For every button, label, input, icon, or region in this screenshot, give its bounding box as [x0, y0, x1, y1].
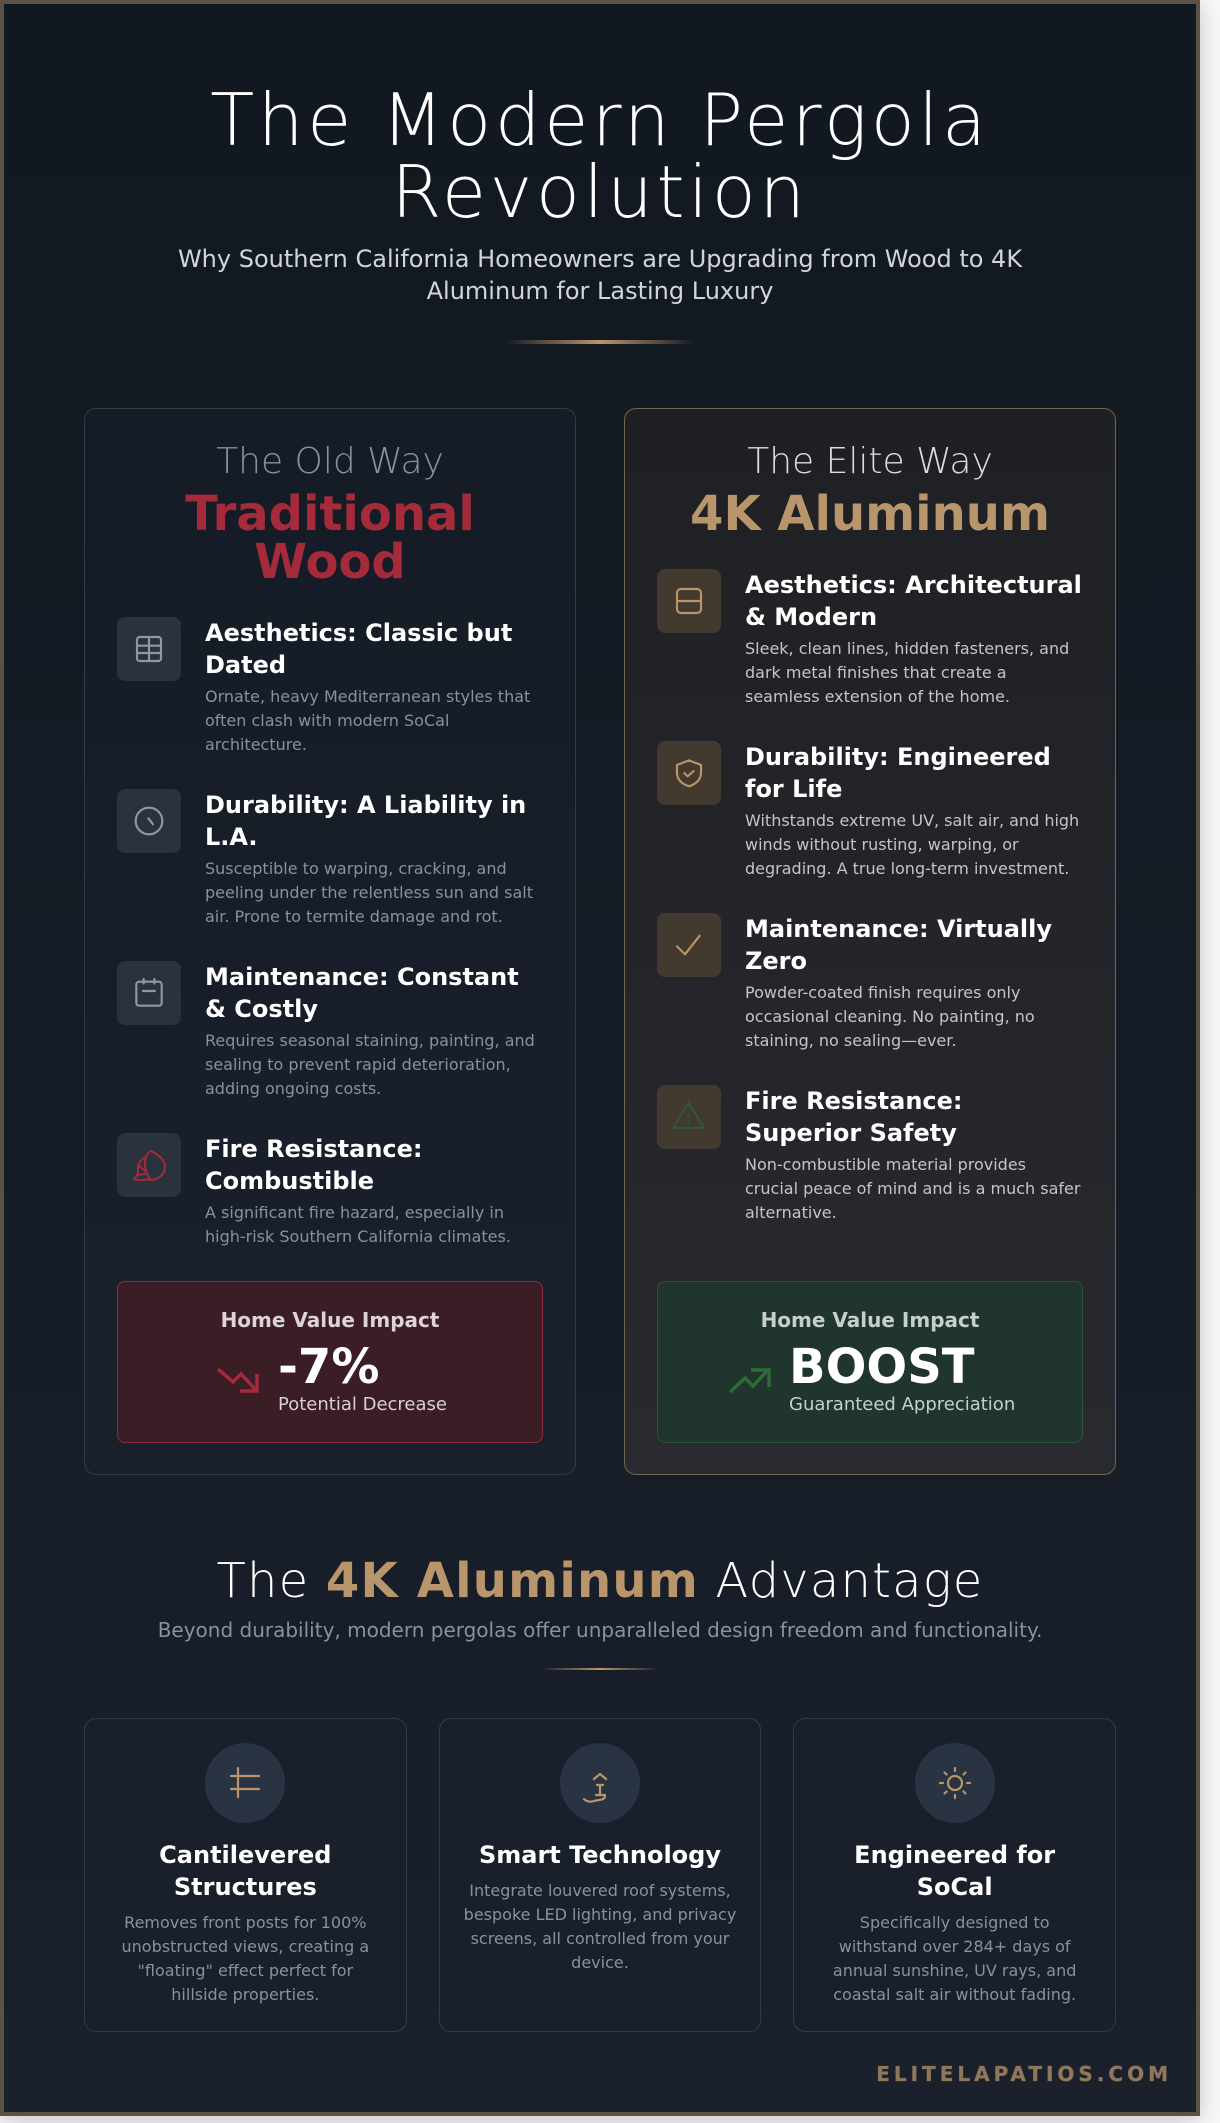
item title: Aesthetics: Architectural [745, 571, 1082, 599]
icon: trending down arrow [216, 1368, 259, 1393]
card: smart technology [439, 1718, 761, 2032]
item description: Requires seasonal staining, painting, and [205, 1031, 535, 1050]
item description [745, 983, 1035, 1050]
item title: Durability: Engineered [745, 743, 1051, 771]
item description: adding ongoing costs. [205, 1079, 381, 1098]
item description: architecture. [205, 735, 307, 754]
impact value: -7% [278, 1339, 379, 1395]
item title: Dated [205, 651, 286, 679]
card description: unobstructed views, creating a [122, 1937, 369, 1956]
item description [205, 1203, 511, 1246]
item description: Ornate, heavy Mediterranean styles that [205, 687, 530, 706]
panel: the old way [84, 408, 576, 1475]
card description [122, 1913, 369, 2004]
card title: Cantilevered [159, 1841, 331, 1869]
item description: Sleek, clean lines, hidden fasteners, and [745, 639, 1069, 658]
item: aesthetics [117, 617, 530, 754]
item title: Aesthetics: Classic but [205, 619, 512, 647]
item description [205, 859, 533, 926]
item title: & Costly [205, 995, 318, 1023]
card: cantilevered structures [84, 1718, 407, 2032]
item description: seamless extension of the home. [745, 687, 1010, 706]
item description: occasional cleaning. No painting, no [745, 1007, 1035, 1026]
icon: trending up arrow [729, 1368, 771, 1394]
callout: home value impact boost [657, 1281, 1083, 1443]
impact caption: Potential Decrease [278, 1394, 447, 1415]
section divider [540, 1668, 660, 1670]
card description: "floating" effect perfect for [138, 1961, 353, 1980]
item description: Susceptible to warping, cracking, and [205, 859, 507, 878]
card description: Specifically designed to [860, 1913, 1050, 1932]
item title: & Modern [745, 603, 877, 631]
item description: dark metal finishes that create a [745, 663, 1007, 682]
item description [205, 687, 530, 754]
icon: check mark [657, 913, 721, 977]
impact label: Home Value Impact [761, 1308, 979, 1332]
item description: peeling under the relentless sun and salt [205, 883, 533, 902]
card description: Integrate louvered roof systems, [469, 1881, 731, 1900]
item title [205, 1135, 422, 1195]
item title: Maintenance: Constant [205, 963, 519, 991]
panel heading: the old way: The Old Way [216, 441, 444, 482]
panel name: traditional wood: Traditional [185, 486, 475, 542]
item description: often clash with modern SoCal [205, 711, 449, 730]
icon: panel [657, 569, 721, 633]
card title: Engineered for [854, 1841, 1055, 1869]
card description: coastal salt air without fading. [833, 1985, 1076, 2004]
item title: Fire Resistance: [205, 1135, 422, 1163]
item description [745, 639, 1069, 706]
icon: cantilever [205, 1743, 285, 1823]
item description: degrading. A true long-term investment. [745, 859, 1069, 878]
header divider [504, 340, 696, 344]
card description: hillside properties. [171, 1985, 319, 2004]
card title [159, 1841, 331, 1901]
item title [205, 791, 526, 851]
item title: Maintenance: Virtually [745, 915, 1052, 943]
item title [745, 1087, 962, 1147]
icon: calendar [117, 961, 181, 1025]
item title: Fire Resistance: [745, 1087, 962, 1115]
card title: Structures [174, 1873, 317, 1901]
item title [745, 915, 1052, 975]
panel name: traditional wood [185, 486, 475, 590]
icon: smart control [560, 1743, 640, 1823]
item description: Withstands extreme UV, salt air, and high [745, 811, 1079, 830]
item title: Combustible [205, 1167, 374, 1195]
impact label: Home Value Impact [221, 1308, 439, 1332]
title: Revolution [391, 150, 809, 234]
item title [745, 571, 1082, 631]
item: durability [117, 789, 533, 926]
panel: the elite way [624, 408, 1116, 1475]
item title [205, 963, 519, 1023]
card: engineered for socal [793, 1718, 1116, 2032]
panel heading: the elite way: The Elite Way [747, 441, 993, 482]
item description: staining, no sealing—ever. [745, 1031, 956, 1050]
card title: Smart Technology [479, 1841, 721, 1869]
item description: crucial peace of mind and is a much safer [745, 1179, 1080, 1198]
card description [464, 1881, 736, 1972]
card description: bespoke LED lighting, and privacy [464, 1905, 736, 1924]
item title: L.A. [205, 823, 258, 851]
item: fire resistance [657, 1085, 1080, 1222]
panel name: traditional wood: Wood [254, 534, 406, 590]
panel name: 4k aluminum: 4K Aluminum [690, 486, 1050, 542]
card title: SoCal [917, 1873, 993, 1901]
card description: withstand over 284+ days of [839, 1937, 1071, 1956]
item description: A significant fire hazard, especially in [205, 1203, 504, 1222]
card description [833, 1913, 1076, 2004]
card description: annual sunshine, UV rays, and [833, 1961, 1076, 1980]
card title [854, 1841, 1056, 1901]
item: fire resistance [117, 1133, 511, 1246]
title: The Modern Pergola [210, 78, 990, 162]
subtitle: Aluminum for Lasting Luxury [427, 277, 773, 305]
item description: winds without rusting, warping, or [745, 835, 1019, 854]
icon: clock [117, 789, 181, 853]
section subheading: Beyond durability, modern pergolas offer unparalleled design freedom and functionality. [158, 1618, 1042, 1642]
item description [205, 1031, 535, 1098]
item: maintenance [117, 961, 535, 1098]
title [210, 78, 990, 234]
impact caption: Guaranteed Appreciation [789, 1394, 1015, 1415]
item description [745, 1155, 1080, 1222]
icon: warning triangle [657, 1085, 721, 1149]
item title: Zero [745, 947, 807, 975]
footer brand: ELITELAPATIOS.COM [876, 2062, 1172, 2086]
section heading: The 4K Aluminum Advantage [216, 1553, 983, 1609]
card description: screens, all controlled from your [471, 1929, 729, 1948]
item description: sealing to prevent rapid deterioration, [205, 1055, 511, 1074]
item title: Durability: A Liability in [205, 791, 526, 819]
item description: Powder-coated finish requires only [745, 983, 1020, 1002]
icon: fire [117, 1133, 181, 1197]
item: durability [657, 741, 1079, 878]
icon: grid [117, 617, 181, 681]
card description: device. [571, 1953, 629, 1972]
subtitle: Why Southern California Homeowners are Upgrading from Wood to 4K [178, 245, 1022, 273]
item title [745, 743, 1051, 803]
card description: Removes front posts for 100% [124, 1913, 366, 1932]
item description: Non-combustible material provides [745, 1155, 1026, 1174]
impact value: BOOST [789, 1339, 975, 1395]
item: aesthetics [657, 569, 1082, 706]
item description [745, 811, 1079, 878]
callout: home value impact decrease [117, 1281, 543, 1443]
icon: sun [915, 1743, 995, 1823]
icon: shield check [657, 741, 721, 805]
item title: for Life [745, 775, 842, 803]
item: maintenance [657, 913, 1052, 1050]
item description: air. Prone to termite damage and rot. [205, 907, 503, 926]
item description: alternative. [745, 1203, 837, 1222]
subtitle [178, 245, 1022, 305]
item title: Superior Safety [745, 1119, 957, 1147]
item title [205, 619, 512, 679]
item description: high-risk Southern California climates. [205, 1227, 511, 1246]
